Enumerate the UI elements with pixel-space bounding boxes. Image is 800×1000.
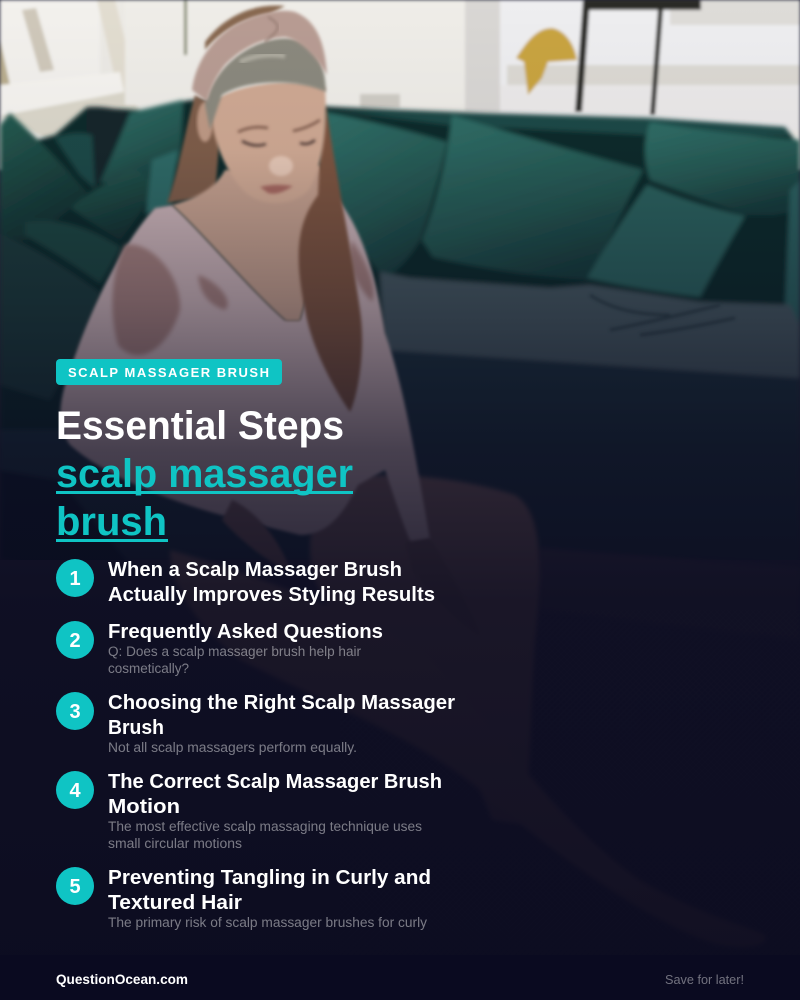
yellow cloth <box>516 28 577 95</box>
hand on leg <box>405 538 480 635</box>
step 1: When a Scalp Massager Brush <box>108 559 402 581</box>
right long hair strand <box>299 105 362 412</box>
sofa back <box>0 100 800 470</box>
step 2: 2 <box>69 630 81 652</box>
tie-dye marks <box>112 240 374 355</box>
step 3: Not all scalp massagers perform equally. <box>108 740 357 755</box>
sofa seat wrinkles <box>590 295 735 335</box>
step 1: 1 <box>69 568 81 590</box>
step 4: Motion <box>108 796 180 818</box>
step 4: small circular motions <box>108 836 242 851</box>
hair above forehead <box>205 38 326 130</box>
step 2: cosmetically? <box>108 661 189 676</box>
step 5: Preventing Tangling in Curly and <box>108 867 431 889</box>
save note: Save for later! <box>665 973 744 987</box>
title: brush <box>56 500 167 544</box>
step 5 <box>56 867 431 930</box>
torso and sleeves <box>60 196 430 545</box>
title: scalp massager <box>56 452 353 496</box>
sofa seat <box>380 272 800 378</box>
legs <box>170 475 766 947</box>
top of hair <box>205 6 285 50</box>
step 3: Choosing the Right Scalp Massager <box>108 692 455 714</box>
face <box>210 82 326 203</box>
step 4 <box>56 771 442 851</box>
category tag <box>56 359 282 385</box>
step 4: The Correct Scalp Massager Brush <box>108 771 442 793</box>
footer bar <box>0 955 800 1000</box>
left cushions <box>87 107 140 188</box>
ear <box>197 102 213 142</box>
step 1 <box>56 559 435 606</box>
eyes, nose and lips <box>238 120 320 194</box>
step 1: Actually Improves Styling Results <box>108 584 435 606</box>
title <box>56 404 353 544</box>
step 3 <box>56 692 455 755</box>
step 2: Frequently Asked Questions <box>108 621 383 643</box>
step 5: Textured Hair <box>108 892 242 914</box>
step 2: Q: Does a scalp massager brush help hair <box>108 644 362 659</box>
step 5: 5 <box>69 876 81 898</box>
step 5: The primary risk of scalp massager brushes for curly <box>108 915 427 930</box>
site name: QuestionOcean.com <box>56 971 188 987</box>
back cushions <box>325 112 447 280</box>
step 4: The most effective scalp massaging technique uses <box>108 819 422 834</box>
black stand <box>575 0 701 115</box>
long hair back <box>167 95 222 203</box>
room wall and windows <box>0 0 800 170</box>
step 4: 4 <box>69 780 81 802</box>
category tag: SCALP MASSAGER BRUSH <box>68 365 269 380</box>
rug and floor <box>0 548 800 1000</box>
title: Essential Steps <box>56 404 344 448</box>
neck and chest <box>172 165 335 321</box>
step 2 <box>56 621 383 676</box>
headband <box>192 11 327 102</box>
step 3: 3 <box>69 701 81 723</box>
step 3: Brush <box>108 717 164 739</box>
sofa <box>0 100 800 600</box>
